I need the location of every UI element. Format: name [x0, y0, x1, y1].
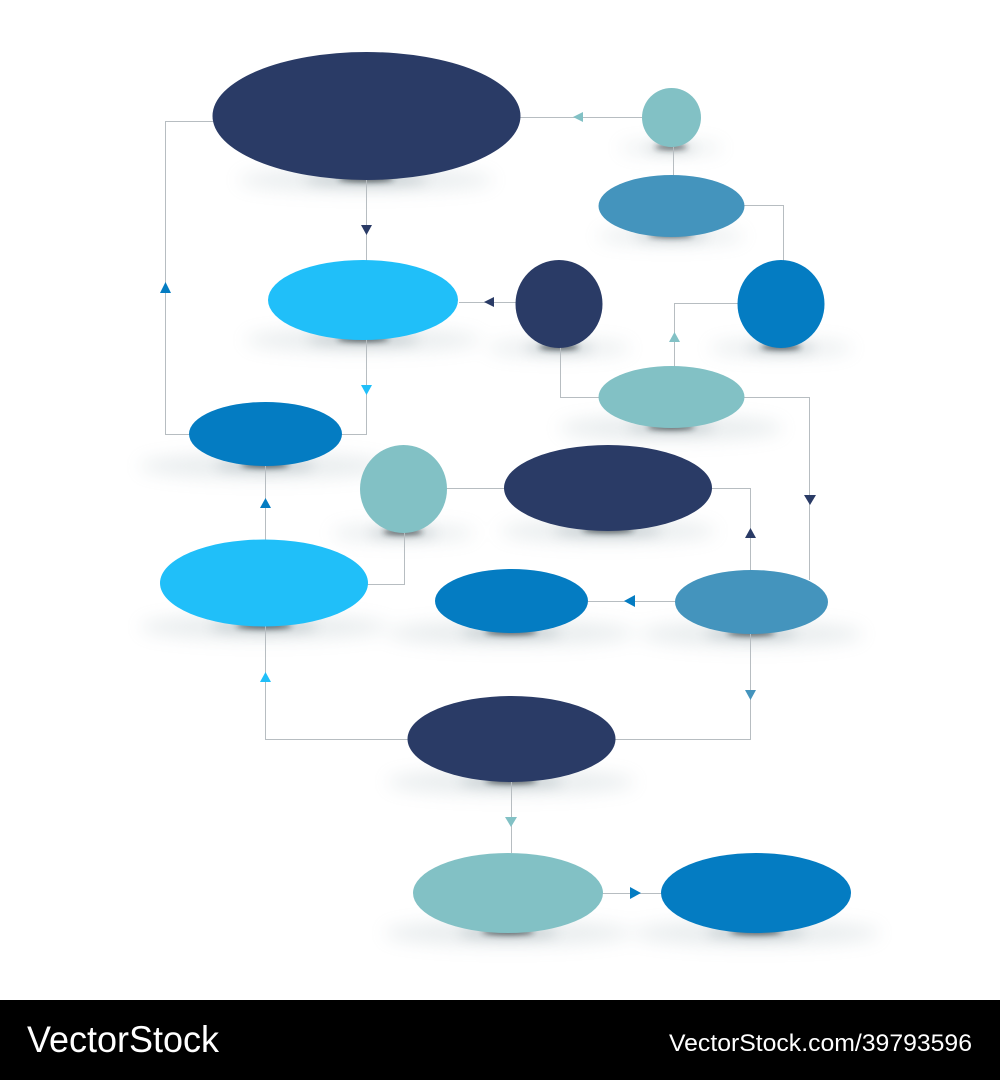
- node: sky blue ellipse left: [160, 540, 368, 626]
- arrow: right blue: [630, 887, 641, 899]
- node: teal ellipse bottom: [413, 853, 603, 933]
- node: blue circle: [738, 260, 824, 348]
- arrow: up teal: [669, 332, 680, 342]
- arrow: down navy: [361, 225, 372, 235]
- node: steel blue ellipse right: [675, 570, 828, 634]
- arrow: up navy right: [745, 528, 756, 538]
- node: navy circle: [516, 260, 602, 348]
- shadows: [139, 142, 880, 945]
- node: teal circle center: [360, 445, 447, 533]
- footer band: [0, 1000, 1000, 1080]
- node: top navy ellipse: [212, 52, 520, 180]
- node: steel blue ellipse: [598, 175, 744, 237]
- arrow: down teal: [505, 817, 517, 827]
- node: top right teal circle: [642, 88, 701, 147]
- node: navy ellipse bottom: [408, 696, 616, 782]
- arrow: up blue: [260, 498, 271, 508]
- node: blue ellipse center: [435, 569, 588, 633]
- arrow: down steel: [745, 690, 756, 700]
- footer brand text: VectorStock: [27, 1019, 219, 1060]
- connector lines: [166, 118, 810, 894]
- node: navy ellipse center: [504, 445, 712, 531]
- arrow: down navy right: [804, 495, 816, 505]
- arrow: up sky: [260, 672, 271, 682]
- arrow: left teal: [573, 112, 583, 122]
- arrow: up blue left: [160, 282, 171, 293]
- footer url text: VectorStock.com/39793596: [669, 1030, 972, 1057]
- node: sky blue ellipse: [268, 260, 458, 340]
- node: blue ellipse bottom right: [661, 853, 851, 933]
- arrow: left blue: [624, 595, 635, 607]
- arrow: left navy: [484, 297, 494, 307]
- node: teal ellipse right: [598, 366, 744, 428]
- arrow: down sky: [361, 385, 372, 395]
- node: blue ellipse left: [189, 402, 342, 466]
